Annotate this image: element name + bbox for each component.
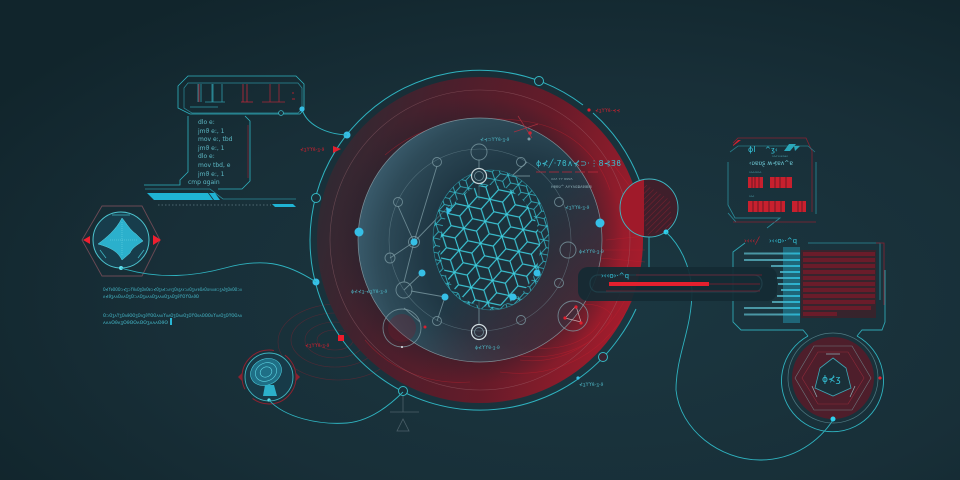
chart: cyan lines xyxy=(744,254,800,314)
panel: globe xyxy=(354,116,604,362)
panel: top-right barcode panel: ʌʌʌʌɐʌʌ xyxy=(749,170,762,174)
heading xyxy=(744,236,797,245)
connector: lens to bottom-right badge xyxy=(666,232,833,460)
labels: red glyph captions: ⊀ʒϒϒϐ-ʒ·ϑ xyxy=(300,147,325,153)
node network xyxy=(383,144,576,348)
panel: top-right barcode panel: ^ʒ‹ xyxy=(765,146,778,154)
heading: globe label: ʜɐɐʋ^ ʌʏʏʌɑɒʌɐ⊞⊞ xyxy=(551,184,592,189)
icon: bottom-right hexagon badge xyxy=(782,333,884,432)
heading: globe label: ɸ⊀╱·7ϐ∧⊀⊃·⋮8⊰3ϐ xyxy=(536,158,621,168)
heading: globe label xyxy=(536,158,621,189)
text: code listing: dlo e: xyxy=(198,153,215,160)
labels: teal glyph captions: ⊀ʒϒϒϐ-ʒ·ϑ xyxy=(565,205,590,211)
labels: teal glyph captions: ⊀ʒϒϒϐ-ʒ·ϑ xyxy=(579,382,604,388)
labels: teal glyph captions xyxy=(351,137,604,388)
labels: teal glyph captions: ɸ⊀ϒϒϐ-ʒ·ϑ xyxy=(475,345,500,351)
heading: ›‹‹‹╱ xyxy=(744,236,760,245)
connector: top-left panel to ring xyxy=(302,109,347,135)
icon: right circular lens xyxy=(620,179,678,268)
icon: red triangle node xyxy=(558,301,588,331)
text: code listing: cmp ɑgain xyxy=(188,179,220,186)
text: bar label: ›‹‹o›·^q xyxy=(601,272,629,280)
connector: dish to ring xyxy=(269,392,403,423)
text: code listing xyxy=(188,119,233,186)
icon: radar dish badge xyxy=(238,350,300,404)
left contour lines xyxy=(278,304,398,380)
bars: blue stripes xyxy=(145,189,296,207)
text: code listing: jmϑ e:, 1 xyxy=(197,128,225,135)
text: code listing: jmϑ e:, 1 xyxy=(197,171,225,178)
panel: top-right barcode panel: ʌʌʌʏʌɐʌɐʌ xyxy=(772,154,788,158)
icon: bottom-right hexagon badge: ɸ⊀ʒ xyxy=(822,375,841,385)
labels: red glyph captions: ⊀ʒϒϒϐ-ʒ·ϑ xyxy=(305,343,330,349)
text block: glyph lines: ʘ⊀ϒɐʘʘʘ⊃⊀ʒ⊃ϒϐʌʘʒʘɐʘɐ⊃⊀ʘʒʌ⊀⊃ʌʏʒʘʌʒʌʏ⊃ʌʘʒʌʏɐʘʌʘɑʏʌʌɐ⊃ʒʌϑʒʘɐʘʘ⊃ʌ xyxy=(103,287,242,292)
connector: hex badge to ring xyxy=(121,263,316,282)
icon: hexagon mesh badge xyxy=(82,206,161,276)
panel: top-right barcode panel: ɸl xyxy=(748,145,756,154)
chart: header bars xyxy=(190,84,295,107)
blue nodes xyxy=(354,218,604,300)
panel: data panel xyxy=(733,236,885,336)
labels: teal glyph captions: ⊀⊰⊃ϒϒϐ-ʒ·ϑ xyxy=(480,137,510,143)
icon: balance symbol xyxy=(390,396,419,431)
sphere xyxy=(433,168,549,310)
ring nodes xyxy=(312,76,608,396)
text block: glyph lines: ʌʌʌʘϑʌʒʘϑʘʘʌʘʘʒʌʌʌʘϑʘ xyxy=(103,320,169,325)
heading: ›‹‹o›·^q xyxy=(769,237,797,245)
heading: globe label: ʌʌʌ ʏʏ ɐɐɐʌ xyxy=(551,177,574,181)
panel: central red disk xyxy=(317,77,645,403)
chart: barcodes xyxy=(748,177,806,212)
panel: top-left code panel xyxy=(144,76,305,207)
panel: top-right barcode panel: ‹ʋɐʋʂ ʍ⊰ɐʌ^ɐ xyxy=(749,160,793,167)
text: code listing: jmϑ e:, 1 xyxy=(197,145,225,152)
text: code listing: mov e:, tbd xyxy=(198,136,233,143)
labels: red glyph captions: ⊀ʒϒϒϐ-⊰⊰ xyxy=(595,108,620,114)
small red cross lines xyxy=(514,116,538,140)
text block: glyph lines xyxy=(103,287,242,325)
labels: red glyph captions xyxy=(300,108,620,349)
labels: teal glyph captions: ɸ⊀ϒϒϐ-ʒ·ϑ xyxy=(579,249,604,255)
text block: glyph lines: ʘ⊃ʘʒʌϒʒʘʌϑʘʘʒʘʌʒϑϒʘʘʌʌʌϒʌʌʘʒʘʌʌʘʒʘϒʘɐʌʘʘʘʌϒʌʌʘʒʘϒʘʘʌʌ xyxy=(103,313,242,318)
panel: top-right barcode panel xyxy=(728,138,816,228)
text: code listing: dlo e: xyxy=(198,119,215,126)
text block: glyph lines: ʌ⊀ϑʒʌʌʘʌʌʘʒʘ⊃ʌʘʒʌʌʌʘʒʌʌʌʘʒʌʘʒϑϒʘϒʘʌϑʘ xyxy=(103,294,200,299)
panel: top-right barcode panel: ʌʌʌ xyxy=(749,194,755,198)
labels: teal glyph captions: ɸ⊀⊀ʒ-⊀ʒϒϐ-ʒ·ϑ xyxy=(351,289,387,295)
text: code listing: mov tbd, e xyxy=(198,162,231,169)
outer ring xyxy=(310,70,649,410)
chart: red stripes xyxy=(801,250,876,318)
red contour lines xyxy=(365,119,645,382)
panel: progress bar capsule xyxy=(578,267,777,301)
